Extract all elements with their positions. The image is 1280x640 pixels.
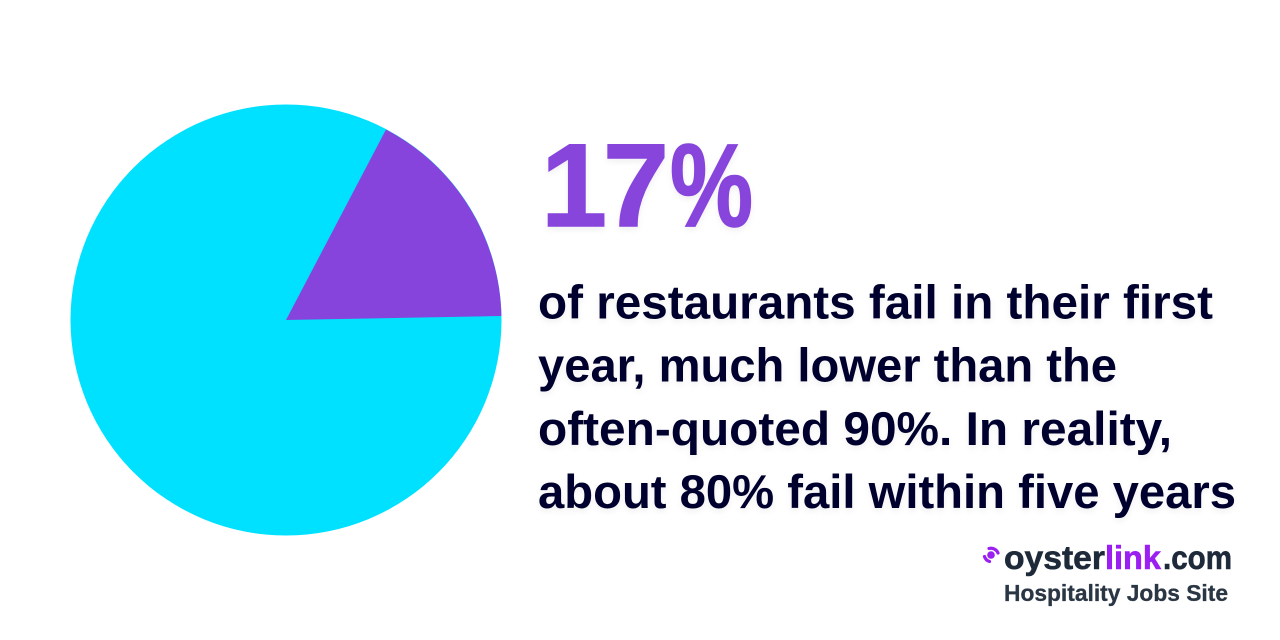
logo: oysterlink.com <box>984 539 1232 606</box>
description text: year, much lower than the <box>538 339 1117 392</box>
description text: about 80% fail within five years <box>538 465 1236 518</box>
big statistic: 17%: 1 <box>541 120 607 252</box>
icon: oyster logo mark <box>984 548 998 562</box>
description text: of restaurants fail in their first <box>538 275 1213 328</box>
logo wordmark: .com <box>1163 539 1232 576</box>
description text <box>538 275 1236 518</box>
pie chart: 17% of restaurants <box>70 104 502 536</box>
logo wordmark <box>1004 539 1232 576</box>
big statistic: 17% <box>541 120 753 252</box>
logo tagline: Hospitality Jobs Site <box>1004 580 1228 606</box>
description text: often-quoted 90%. In reality, <box>538 402 1172 455</box>
big statistic: 17%: 7 <box>603 120 669 252</box>
big statistic: 17%: % <box>670 120 753 252</box>
logo wordmark: oyster <box>1004 539 1105 576</box>
logo wordmark: link <box>1105 539 1162 576</box>
